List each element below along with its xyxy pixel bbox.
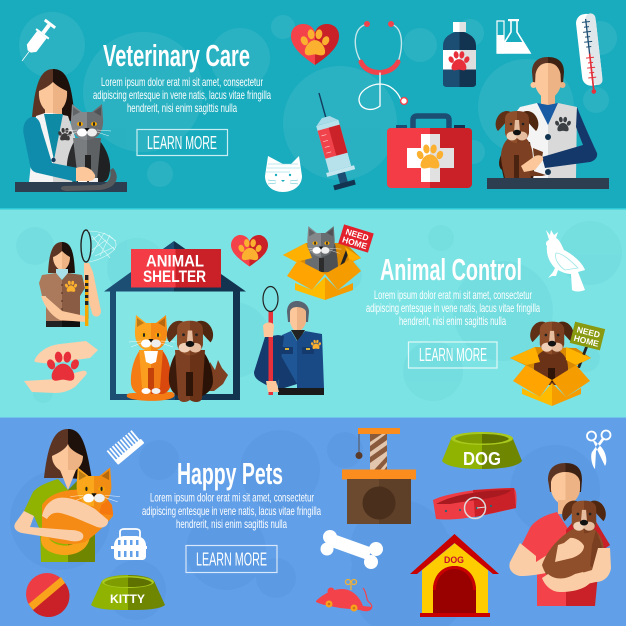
- figure: vet man with dog: [496, 57, 597, 185]
- sign: animal shelter: [131, 249, 221, 288]
- icon: kitty bowl: KITTY: [110, 594, 145, 606]
- panel: animal control: [0, 210, 626, 418]
- button: learn more: [137, 130, 228, 156]
- icon: big syringe: [305, 89, 359, 191]
- button: learn more: LEARN MORE: [147, 133, 217, 153]
- icon: comb: [107, 429, 144, 465]
- sign: need home green: HOME: [573, 333, 600, 349]
- icon: dog house: [410, 534, 499, 617]
- button: learn more: [408, 342, 497, 368]
- icon: first aid kit: [387, 116, 472, 188]
- title: happy pets: Happy Pets: [177, 456, 283, 491]
- figure: man holding dog: [509, 463, 610, 606]
- icon: white syringe: [16, 18, 57, 66]
- text block: happy pets body: [142, 490, 321, 531]
- text block: happy pets body: Lorem ipsum dolor erat mi sit amet, consectetur: [150, 490, 314, 504]
- icon: red collar: [433, 488, 516, 520]
- icon: dog bowl: [442, 432, 522, 469]
- text block: happy pets body: adipiscing entesque in vene natis, lacus vitae fringilla: [142, 504, 321, 518]
- button: learn more: LEARN MORE: [196, 550, 267, 570]
- sign: need home red: NEED: [344, 226, 370, 243]
- title: veterinary care: Veterinary Care: [103, 38, 250, 73]
- icon: cat tree: [342, 428, 416, 524]
- icon: medicine bottle: [443, 22, 476, 87]
- icon: dog house: DOG: [444, 555, 464, 566]
- figure: woman with orange cat: [14, 429, 120, 562]
- button: learn more: [186, 546, 277, 572]
- sign: animal shelter: SHELTER: [143, 268, 206, 286]
- text block: veterinary care body: Lorem ipsum dolor erat mi sit amet, consectetur: [101, 75, 263, 89]
- table: right: [487, 178, 609, 189]
- sign: need home green: NEED: [576, 324, 601, 340]
- cat tail over table: [61, 168, 117, 191]
- icon: bone: [320, 530, 383, 569]
- dog held by man: [542, 501, 611, 592]
- icon: stethoscope: [355, 21, 407, 109]
- icon: hands holding paw: [24, 341, 98, 393]
- figure: orange cat: [127, 315, 175, 401]
- figure: brown dog: [167, 321, 228, 402]
- icon: heart with paw: [231, 235, 268, 266]
- panel: happy pets: [0, 418, 626, 626]
- panel: veterinary care: [0, 0, 626, 210]
- sign: need home red: HOME: [341, 234, 369, 251]
- icon: pet carrier: [111, 529, 147, 560]
- text block: veterinary care body: adipiscing entesque in vene natis, lacus vitae fringilla: [93, 88, 271, 102]
- sign: need home red: [338, 224, 374, 253]
- sign: animal shelter: ANIMAL: [146, 252, 204, 270]
- title: animal control: Animal Control: [380, 252, 522, 287]
- icon: lab flasks: [497, 19, 530, 53]
- icon: heart with paw: [291, 24, 339, 65]
- figure: officer: [254, 286, 324, 395]
- icon: white parrot: [546, 230, 585, 292]
- figure: cat in box with sign: [283, 226, 361, 300]
- figure: woman with net: [39, 230, 116, 327]
- icon: thermometer: [575, 13, 604, 95]
- icon: ball: [26, 573, 70, 617]
- figure: dog in box with sign: [510, 322, 591, 406]
- text block: veterinary care body: hendrerit, nisi enim sagittis nulla: [127, 101, 237, 115]
- button: learn more: LEARN MORE: [419, 345, 487, 365]
- icon: kitty bowl: [91, 575, 165, 610]
- text block: happy pets body: hendrerit, nisi enim sagittis nulla: [176, 517, 287, 531]
- table: left: [15, 182, 127, 192]
- text block: animal control body: hendrerit, nisi enim sagittis nulla: [399, 314, 506, 328]
- icon: scissors: [587, 430, 610, 469]
- icon: dog bowl: DOG: [463, 449, 501, 469]
- figure: vet woman with cat: [23, 69, 111, 183]
- shelter house: [104, 241, 246, 400]
- icon: wind-up mouse: [316, 580, 372, 612]
- text block: animal control body: Lorem ipsum dolor erat mi sit amet, consectetur: [374, 288, 532, 302]
- text block: veterinary care body: [93, 75, 271, 115]
- icon: white cat head: [265, 156, 302, 192]
- sign: need home green: [570, 322, 605, 350]
- text block: animal control body: [366, 288, 540, 328]
